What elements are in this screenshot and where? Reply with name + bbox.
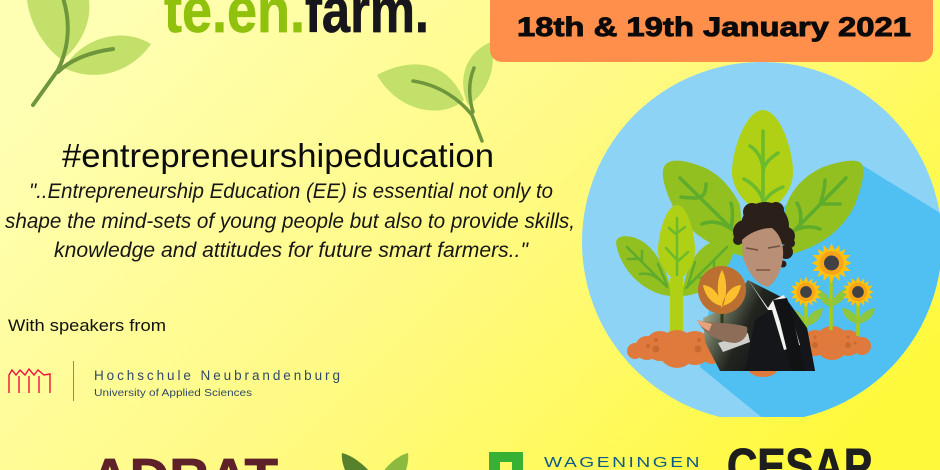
with speakers label: With speakers from — [8, 317, 166, 335]
soil mounds — [627, 326, 871, 377]
logo: Hochschule Neubrandenburg — [9, 361, 340, 401]
hashtag heading: #entrepreneurshipeducation — [62, 137, 494, 174]
hand — [697, 320, 747, 343]
logo: Hochschule Neubrandenburg: Hochschule Neubrandenburg — [94, 368, 340, 383]
wheat badge on hand — [698, 266, 746, 323]
logo: Hochschule Neubrandenburg: University of Applied Sciences — [94, 387, 252, 399]
plant: small left plant — [616, 205, 735, 333]
illustration circle — [580, 60, 940, 420]
businessman — [697, 202, 815, 371]
tie — [773, 298, 800, 350]
logo: green leaves — [342, 453, 408, 470]
quote text: knowledge and attitudes for future smart farmers.." — [54, 239, 530, 262]
hair — [733, 202, 795, 268]
date banner — [490, 0, 933, 62]
plant: large back leaves — [663, 110, 863, 257]
sunflowers — [788, 243, 875, 337]
leaf sprig top left — [27, 0, 151, 105]
quote text: shape the mind-sets of young people but also to provide skills, — [5, 210, 575, 233]
face — [742, 228, 783, 287]
logo: Wageningen — [489, 452, 702, 470]
suit — [703, 280, 815, 371]
quote text: "..Entrepreneurship Education (EE) is essential not only to — [29, 180, 553, 203]
collar and shirt — [747, 278, 800, 350]
forearm and cuff — [718, 333, 750, 352]
leaf sprig top right — [377, 42, 493, 141]
logo: te.en.farm. — [164, 0, 429, 46]
long shadow — [700, 165, 940, 420]
quote text — [5, 180, 575, 262]
date banner: 18th & 19th January 2021 — [517, 12, 911, 42]
